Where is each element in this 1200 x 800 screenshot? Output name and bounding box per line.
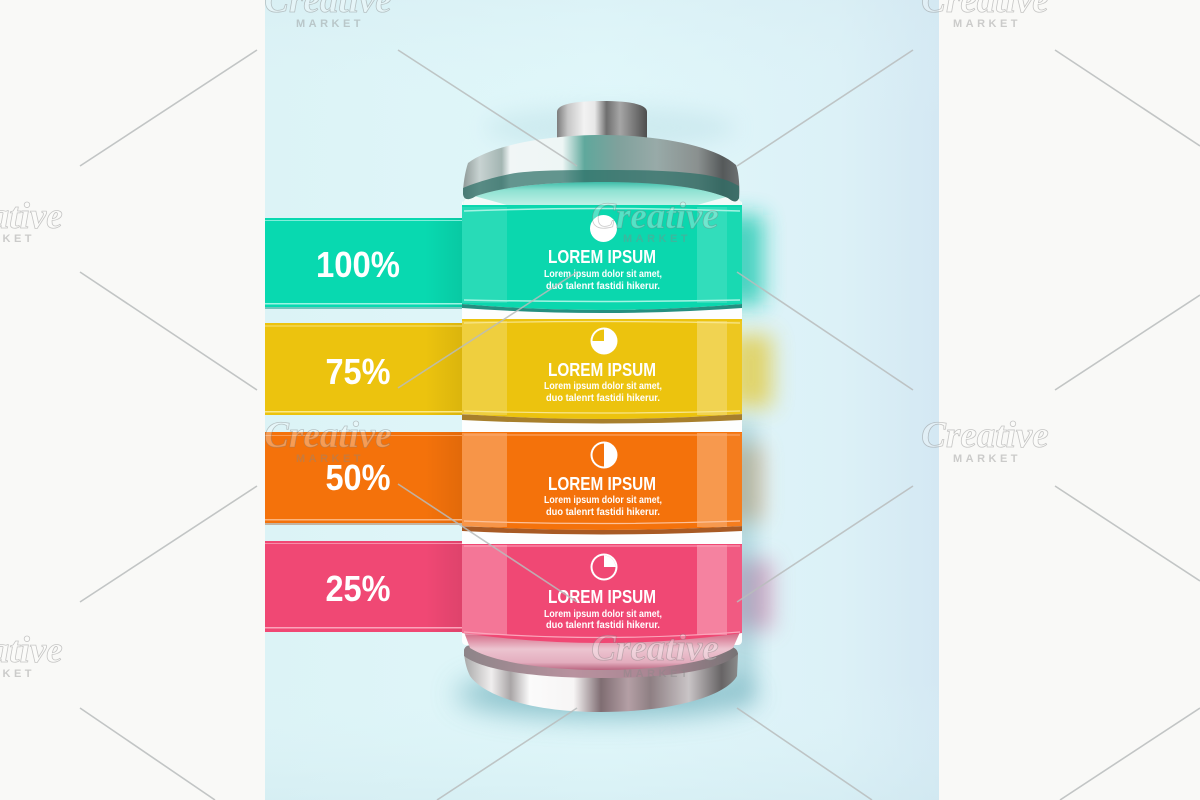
- ribbon: 25%: 25%: [326, 568, 390, 609]
- icon: full circle: [590, 215, 617, 242]
- battery neck: [462, 181, 742, 208]
- battery base glass: [464, 632, 740, 670]
- ribbon: 75%: [265, 323, 465, 415]
- ribbon: 100%: [265, 218, 465, 309]
- watermarks: Creative: [591, 196, 719, 237]
- watermarks: [0, 0, 1049, 680]
- battery: [462, 101, 742, 712]
- white shoulder highlights: [462, 194, 742, 208]
- lid lip: [463, 170, 739, 201]
- poster panel: [265, 0, 939, 800]
- watermarks: MARKET: [296, 18, 364, 30]
- watermarks: Creative: [591, 628, 719, 669]
- watermarks: MARKET: [296, 453, 364, 465]
- watermarks: Creative: [921, 415, 1049, 456]
- band: pink: LOREM IPSUM: [548, 587, 656, 607]
- band: teal: [462, 205, 742, 313]
- battery base: [464, 642, 738, 712]
- base top rim: [464, 646, 738, 678]
- battery glow and shadow: [456, 106, 772, 718]
- band: teal: Lorem ipsum dolor sit amet,: [544, 268, 662, 280]
- battery terminal: [557, 101, 647, 138]
- ribbon: 50%: 50%: [326, 457, 390, 498]
- icon: quarter pie: [590, 554, 618, 580]
- ribbon: 100%: 100%: [316, 244, 400, 285]
- battery lid: [463, 135, 739, 201]
- band: orange: LOREM IPSUM: [548, 474, 656, 494]
- band: orange: duo talenrt fastidi hikerur.: [546, 506, 660, 518]
- band: pink: Lorem ipsum dolor sit amet,: [544, 608, 662, 620]
- band: orange: [462, 432, 742, 534]
- band: teal: LOREM IPSUM: [548, 247, 656, 267]
- band: pink: [462, 544, 742, 643]
- band: yellow: duo talenrt fastidi hikerur.: [546, 392, 660, 404]
- band: pink: duo talenrt fastidi hikerur.: [546, 619, 660, 631]
- watermarks: MARKET: [623, 233, 691, 245]
- white battery body: [462, 200, 742, 645]
- watermarks: MARKET: [953, 18, 1021, 30]
- band: orange: Lorem ipsum dolor sit amet,: [544, 494, 662, 506]
- band: yellow: LOREM IPSUM: [548, 360, 656, 380]
- band: yellow: Lorem ipsum dolor sit amet,: [544, 380, 662, 392]
- band: yellow: [462, 319, 742, 424]
- watermarks: MARKET: [953, 453, 1021, 465]
- watermarks: MARKET: [623, 668, 691, 680]
- watermarks: Creative: [264, 415, 392, 456]
- band: teal: duo talenrt fastidi hikerur.: [546, 280, 660, 292]
- icon: three-quarter pie: [590, 328, 618, 354]
- ribbon: 75%: 75%: [326, 351, 390, 392]
- ribbon: 25%: [265, 541, 465, 632]
- icon: half pie: [590, 442, 618, 468]
- ribbon: 50%: [265, 432, 465, 525]
